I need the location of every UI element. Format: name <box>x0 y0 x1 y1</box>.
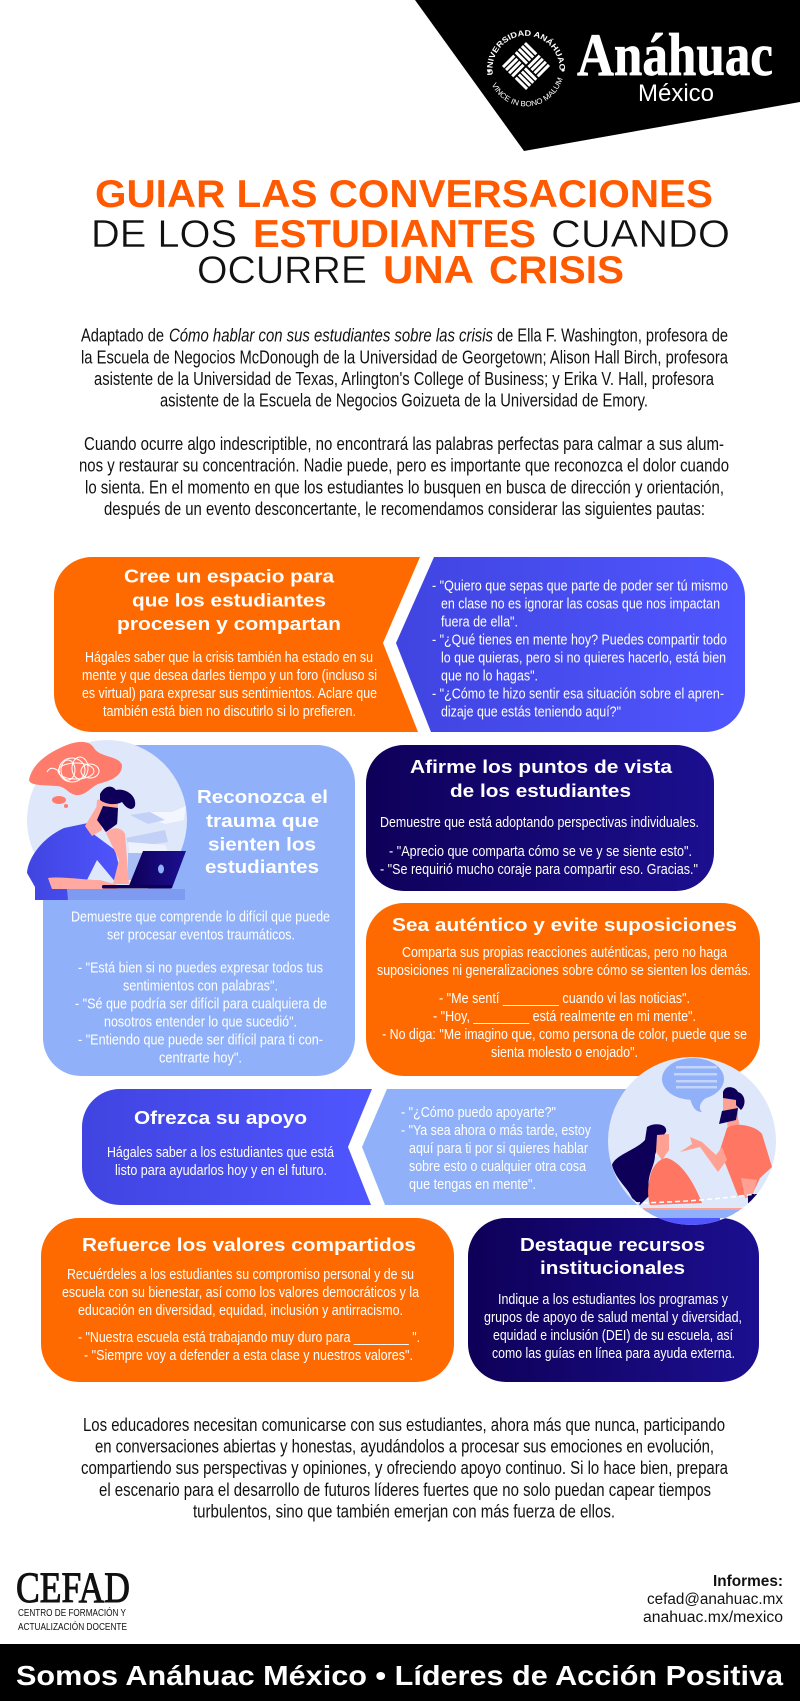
panel: destaque recursos: Destaque recursos <box>520 1234 705 1255</box>
illustration: stressed man at laptop <box>27 740 187 900</box>
body text <box>82 649 377 720</box>
man <box>680 1087 772 1204</box>
panel: afirme los puntos de vista: Demuestre que está adoptando perspectivas individuales. <box>380 814 699 831</box>
title: CRISIS <box>489 249 624 292</box>
panel: example quotes: fuera de ella". <box>441 614 518 631</box>
body text: - "Sé que podría ser difícil para cualquiera de <box>75 996 327 1013</box>
panel: destaque recursos: equidad e inclusión (DEI) de su escuela, así <box>493 1327 734 1344</box>
speech bubble <box>662 1058 724 1112</box>
panel: refuerce los valores: - "Siempre voy a defender a esta clase y nuestros valores". <box>84 1347 413 1364</box>
panel: example quotes: dizaje que estás teniendo aquí?" <box>441 704 621 721</box>
panel: example quotes: lo que quieras, pero si no quieres hacerlo, está bien <box>441 650 726 667</box>
body text: sentimientos con palabras". <box>123 978 278 995</box>
closing paragraph: turbulentos, sino que también emerjan con más fuerza de ellos. <box>193 1501 615 1521</box>
heading <box>197 786 328 877</box>
body text: mente y que desea darles tiempo y un foro (incluso si <box>82 667 377 684</box>
title: ESTUDIANTES <box>253 213 536 256</box>
intro paragraph: context <box>79 434 729 519</box>
laptop <box>102 851 186 888</box>
body text: - "Entiendo que puede ser difícil para ti con- <box>78 1032 323 1049</box>
table <box>635 1194 755 1226</box>
closing paragraph <box>81 1415 729 1521</box>
woman <box>612 1124 702 1205</box>
body text: centrarte hoy". <box>159 1050 242 1067</box>
panel: refuerce los valores <box>41 1218 454 1382</box>
title: GUIAR LAS CONVERSACIONES <box>95 173 713 216</box>
heading: trauma que <box>206 810 319 831</box>
panel: support quotes: aquí para ti por si quieres hablar <box>409 1140 588 1157</box>
wordmark: México <box>638 80 714 107</box>
panel: example quotes: que no lo hagas". <box>441 668 538 685</box>
panel: afirme los puntos de vista: de los estudiantes <box>450 780 631 801</box>
title: DE LOS <box>91 213 237 256</box>
body text: Demuestre que comprende lo difícil que puede <box>71 909 330 926</box>
CEFAD logo: CEFAD <box>16 1565 130 1612</box>
panel: example quotes: - "¿Cómo te hizo sentir esa situación sobre el apren- <box>432 686 724 703</box>
title: CUANDO <box>551 213 730 256</box>
man <box>27 787 135 900</box>
panel: sea autentico: - "Hoy, ________ está realmente en mi mente". <box>433 1008 696 1025</box>
footer banner: Somos Anáhuac México • Líderes de Acción Positiva <box>16 1660 783 1691</box>
header black banner with logo <box>415 0 800 151</box>
panel: afirme los puntos de vista: - "Se requirió mucho coraje para compartir eso. Gracias." <box>380 861 698 878</box>
panel: ofrezca su apoyo: listo para ayudarlos hoy y en el futuro. <box>115 1162 327 1179</box>
panel: refuerce los valores: educación en diversidad, equidad, inclusión y antirracismo. <box>78 1302 403 1319</box>
body text: también está bien no discutirlo si lo prefieren. <box>103 703 356 720</box>
CEFAD logo: CENTRO DE FORMACIÓN Y <box>18 1606 126 1619</box>
contact info: cefad@anahuac.mx <box>647 1591 783 1608</box>
desk <box>67 889 185 900</box>
heading: que los estudiantes <box>132 590 326 611</box>
panel: support quotes: que tengas en mente". <box>409 1176 536 1193</box>
body text: - "Está bien si no puedes expresar todos tus <box>78 960 323 977</box>
body text: ser procesar eventos traumáticos. <box>107 927 295 944</box>
heading: estudiantes <box>205 856 319 877</box>
panel: sea autentico: Comparta sus propias reacciones auténticas, pero no haga <box>402 944 728 961</box>
body text: Hágales saber que la crisis también ha estado en su <box>85 649 373 666</box>
panel: example quotes: en clase no es ignorar las cosas que nos impactan <box>441 596 720 613</box>
heading: Reconozca el <box>197 786 328 807</box>
intro paragraph: attribution: Adaptado de <box>81 326 164 346</box>
panel: ofrezca su apoyo: Hágales saber a los estudiantes que está <box>107 1144 335 1161</box>
panel: refuerce los valores: - "Nuestra escuela está trabajando muy duro para ________ ". <box>78 1329 420 1346</box>
illustration: two people talking <box>608 1057 776 1226</box>
title <box>91 173 730 292</box>
panel: afirme los puntos de vista: - "Aprecio que comparta cómo se ve y se siente esto". <box>389 843 692 860</box>
panel: destaque recursos: institucionales <box>540 1257 685 1278</box>
body text <box>71 909 330 1067</box>
panel: example quotes: - "¿Qué tienes en mente hoy? Puedes compartir todo <box>432 632 727 649</box>
panel: refuerce los valores: Recuérdeles a los estudiantes su compromiso personal y de su <box>67 1266 414 1283</box>
seal logo <box>486 30 566 106</box>
panel: support quotes: - "Ya sea ahora o más tarde, estoy <box>401 1122 591 1139</box>
panel: support quotes: sobre esto o cualquier otra cosa <box>409 1158 587 1175</box>
panel: example quotes <box>396 557 745 732</box>
contact info: anahuac.mx/mexico <box>643 1609 783 1626</box>
panel: example quotes: - "Quiero que sepas que parte de poder ser tú mismo <box>432 578 728 595</box>
seal logo: UNIVERSIDAD ANÁHUAC <box>486 30 566 75</box>
panel: destaque recursos: grupos de apoyo de salud mental y diversidad, <box>484 1309 742 1326</box>
contact info: Informes: <box>713 1573 783 1590</box>
seal logo: VINCE IN BONO MALUM <box>492 77 562 106</box>
panel: sea autentico: - "Me sentí ________ cuando vi las noticias". <box>439 990 690 1007</box>
panel: sea autentico <box>366 903 760 1076</box>
panel: refuerce los valores: Refuerce los valores compartidos <box>82 1234 416 1255</box>
panel: ofrezca su apoyo <box>82 1089 372 1205</box>
panel: destaque recursos <box>468 1218 759 1382</box>
intro paragraph: attribution: Cómo hablar con sus estudiantes sobre las crisis <box>169 326 493 346</box>
panel: support quotes: - "¿Cómo puedo apoyarte?" <box>401 1104 556 1121</box>
body text: nosotros entender lo que sucedió". <box>104 1014 297 1031</box>
CEFAD logo <box>16 1565 130 1633</box>
title: UNA <box>383 249 474 292</box>
contact info <box>643 1573 783 1626</box>
CEFAD logo: ACTUALIZACIÓN DOCENTE <box>18 1620 127 1633</box>
thought bubble <box>29 742 122 808</box>
panel: destaque recursos: Indique a los estudiantes los programas y <box>498 1291 728 1308</box>
heading: sienten los <box>208 834 316 855</box>
intro paragraph: attribution: asistente de la Escuela de Negocios Goizueta de la Universidad de Emory. <box>160 391 648 411</box>
intro paragraph: attribution: de Ella F. Washington, profesora de <box>497 326 728 346</box>
title: OCURRE <box>197 249 367 292</box>
panel: reconozca el trauma <box>43 745 355 1076</box>
intro paragraph: attribution <box>81 326 729 411</box>
panel: sea autentico: sienta molesto o enojado". <box>491 1044 638 1061</box>
panel: refuerce los valores: escuela con su bienestar, así como los valores democráticos y la <box>62 1284 420 1301</box>
panel: afirme los puntos de vista <box>366 745 714 891</box>
footer banner <box>0 1644 800 1701</box>
body text: es virtual) para expresar sus sentimientos. Aclare que <box>82 685 377 702</box>
panel: destaque recursos: como las guías en línea para ayuda externa. <box>492 1345 735 1362</box>
heading: Cree un espacio para <box>124 566 335 587</box>
panel: sea autentico: Sea auténtico y evite suposiciones <box>392 914 737 935</box>
panel: support quotes <box>362 1089 680 1205</box>
heading: procesen y compartan <box>117 613 341 634</box>
panel: cree un espacio <box>54 557 420 732</box>
panel: afirme los puntos de vista: Afirme los puntos de vista <box>410 756 673 777</box>
panel: ofrezca su apoyo: Ofrezca su apoyo <box>134 1107 307 1128</box>
heading <box>117 566 341 634</box>
